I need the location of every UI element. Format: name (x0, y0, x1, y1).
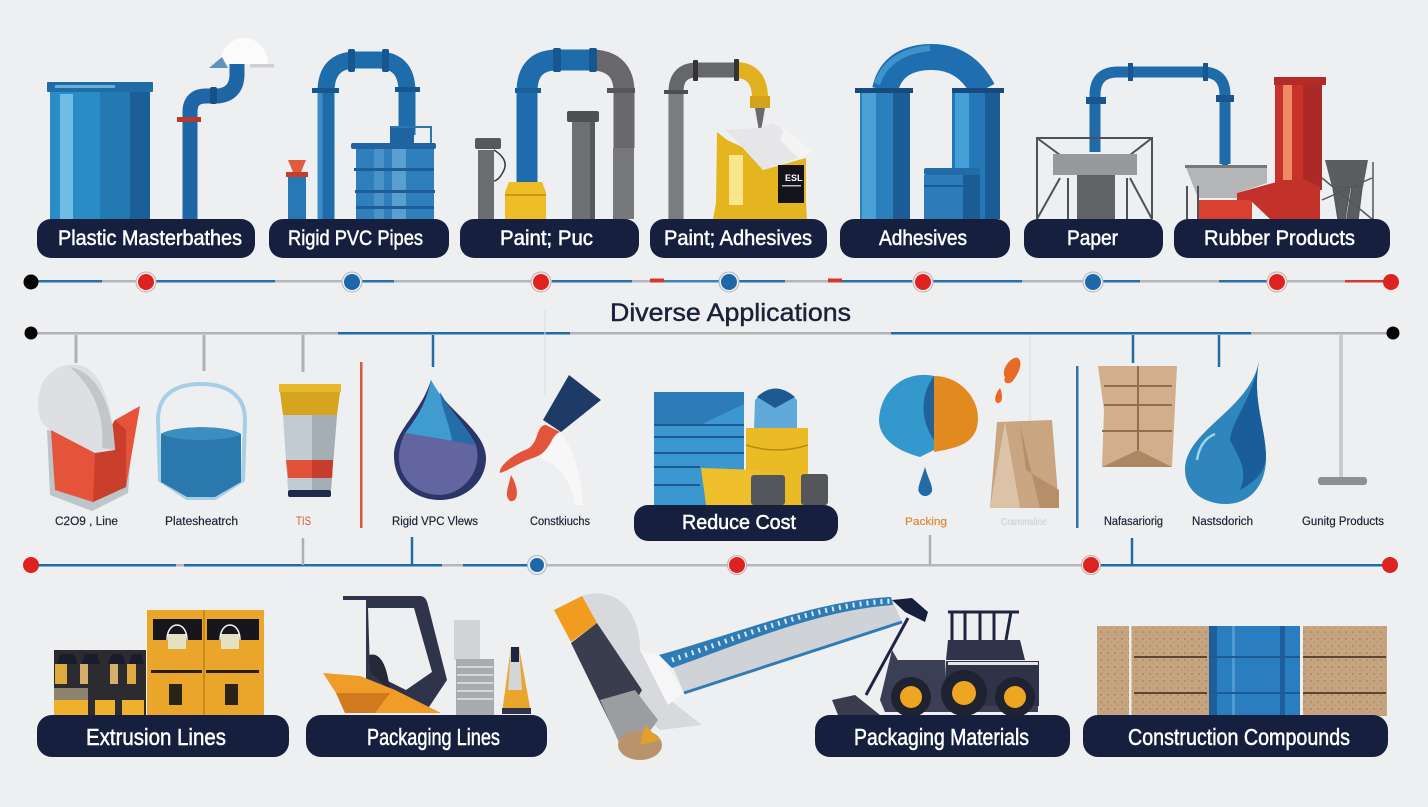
label: paint, PVC (460, 219, 639, 258)
icon: blue drum (351, 126, 436, 219)
item: blue bucket (158, 384, 245, 528)
panel: rubber products (1174, 77, 1390, 258)
label: rigid PVC pipes (269, 219, 449, 258)
icon: yellow container (713, 123, 813, 219)
caption: bucket: Platesheatrch (165, 516, 238, 528)
item: tan sack (1098, 366, 1177, 528)
icon: small grey post (475, 138, 505, 219)
icon: conveyor hopper arm (554, 593, 928, 760)
icon: blue tank (47, 82, 153, 219)
item: red cup (38, 365, 140, 528)
label: paint, adhesives: Paint; Adhesives (664, 227, 812, 250)
timeline: top connector with nodes (24, 272, 1399, 292)
label: extrusion lines: Extrusion Lines (86, 724, 226, 750)
icon: small blue drum (924, 168, 980, 219)
timeline: lower connector with nodes (23, 535, 1398, 574)
heading: diverse applications: Diverse Applications (610, 299, 851, 327)
label: packaging lines (306, 715, 547, 757)
label: reduce cost (634, 505, 838, 541)
icon: yellow cabinets (147, 610, 264, 715)
icon: bricks and blue column (1097, 626, 1387, 716)
label: packaging materials (815, 715, 1070, 757)
panel: packaging materials (815, 612, 1070, 757)
icon: small red valve (286, 160, 308, 219)
icon: skid loader (832, 612, 1039, 717)
label: rubber products: Rubber Products (1204, 227, 1355, 250)
label: paint, adhesives (650, 219, 827, 258)
icon: blue and grey arch pipe (505, 48, 635, 219)
panel: adhesives (840, 48, 1010, 258)
caption: drop: Nastsdorich (1192, 516, 1253, 528)
caption: balloon: Packing (905, 516, 947, 528)
icon: grey and yellow pipe (664, 59, 770, 219)
icon: elbow pipe with cap (177, 38, 274, 219)
label: construction compounds (1083, 715, 1388, 757)
label: plastic masterbatches: Plastic Masterbathes (58, 227, 242, 250)
caption: tube: TIS (296, 516, 311, 528)
panel: construction compounds (1083, 626, 1388, 757)
caption: bottle: Constkiuchs (530, 516, 590, 528)
icon: traffic cone (502, 647, 531, 714)
caption: sack: Nafasariorig (1104, 516, 1163, 528)
icon: stretch film and stacked box (454, 620, 494, 715)
label: paper (1024, 219, 1163, 258)
panel: paint, adhesives (650, 59, 827, 258)
divider: red vertical rule (360, 362, 362, 528)
item: blue and orange balloon (879, 375, 978, 528)
caption: cup: C2O9 , Line (55, 516, 118, 528)
item: reduce cost stack (654, 388, 828, 505)
item: paper bag with orange drops (990, 358, 1059, 528)
label: paper: Paper (1067, 227, 1118, 250)
label: extrusion lines (37, 715, 289, 757)
item: paint bottle with splash (500, 375, 601, 528)
item: purple drop (392, 380, 486, 528)
label: paint, PVC: Paint; Puc (500, 227, 593, 250)
label: adhesives (840, 219, 1010, 258)
caption: drop: Rigid VPC Vlews (392, 516, 478, 528)
item: paint tube (279, 384, 341, 528)
caption: mop: Gunitg Products (1302, 516, 1384, 528)
label: rigid PVC pipes: Rigid PVC Pipes (288, 227, 423, 250)
panel: extrusion lines (37, 610, 289, 757)
icon: forklift (323, 596, 447, 713)
label: packaging materials: Packaging Materials (854, 724, 1029, 750)
icon: large blue columns with arch (855, 48, 1004, 219)
label: packaging lines: Packaging Lines (367, 724, 500, 750)
label: construction compounds: Construction Compounds (1128, 724, 1350, 750)
panel: rigid PVC pipes (269, 49, 449, 258)
icon: yellow container: ESL (785, 173, 803, 183)
icon: blue arch pipe (312, 49, 420, 219)
label: adhesives: Adhesives (879, 227, 967, 250)
panel: paper (1024, 63, 1234, 258)
icon: red rubber machine (1185, 77, 1373, 219)
label: rubber products (1174, 219, 1390, 258)
icon: grey column (567, 111, 599, 219)
label: reduce cost: Reduce Cost (682, 512, 796, 534)
panel: paint, PVC (460, 48, 639, 258)
caption: paper bag: Crammsline (1001, 517, 1047, 528)
item: mop (1302, 335, 1384, 528)
label: plastic masterbatches (37, 219, 255, 258)
icon: paper machine frame (1037, 138, 1152, 219)
panel: plastic masterbatches (37, 38, 274, 258)
icon: blue overhead pipe (1086, 63, 1234, 164)
panel: packaging lines (306, 596, 547, 757)
timeline: middle connector with drop lines (24, 310, 1400, 420)
divider: blue vertical rule (1076, 366, 1078, 528)
item: big blue drop (1185, 361, 1266, 528)
icon: bottles rack (54, 650, 146, 715)
